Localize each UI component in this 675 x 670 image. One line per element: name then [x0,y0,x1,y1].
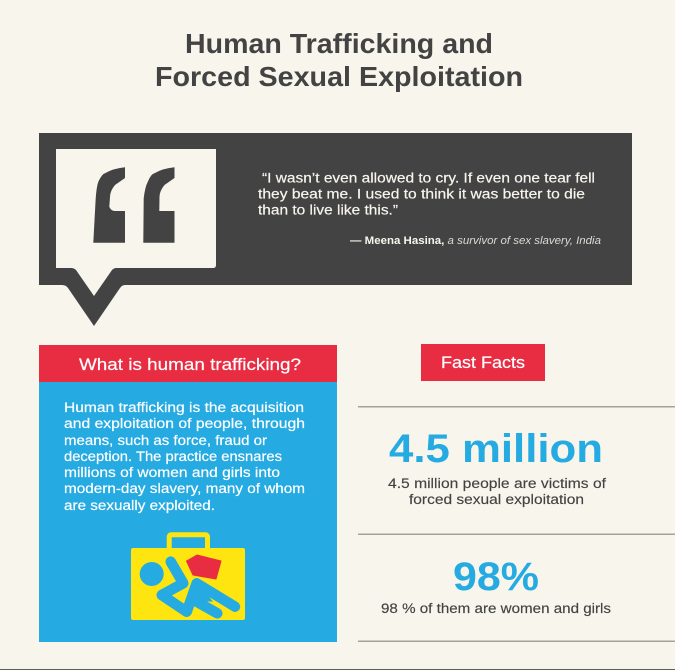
quote attribution: — Meena Hasina, a survivor of sex slavery, India [350,235,601,247]
title [155,28,523,92]
statistic caption: victims: 4.5 million people are victims of [388,476,606,491]
title: Forced Sexual Exploitation [155,61,523,92]
definition text: means, such as force, fraud or [64,433,268,448]
icon: speech bubble with quotation marks [56,149,216,296]
panel: what is human trafficking [39,345,337,642]
panel: survivor quote [39,133,632,326]
definition text: modern-day slavery, many of whom [64,481,305,496]
statistic: 4.5 million: 4.5 million [389,427,603,471]
panel header: What is human trafficking? [79,355,301,374]
definition text: millions of women and girls into [64,465,280,480]
statistic caption: victims: forced sexual exploitation [409,492,584,507]
definition text: Human trafficking is the acquisition [64,400,304,415]
fast facts heading: Fast Facts [441,354,525,372]
quote text: they beat me. I used to think it was better to die [258,186,585,202]
definition text: and exploitation of people, through [64,416,305,431]
fast facts heading [421,344,545,381]
statistic caption: women and girls: 98 % of them are women and girls [381,601,611,616]
statistic caption: victims [388,476,606,507]
panel header [39,345,337,382]
definition text [64,400,305,513]
definition text: deception. The practice ensnares [64,449,282,464]
definition text: are sexually exploited. [64,498,215,513]
panel: fast facts [358,344,675,642]
quote text [258,170,595,218]
quote text: “I wasn’t even allowed to cry. If even one tear fell [262,170,595,186]
title: Human Trafficking and [185,28,493,59]
panel body [39,382,337,642]
statistic: 98%: 98% [453,555,539,599]
speech bubble background [39,133,632,326]
quote text: than to live like this.” [258,202,398,218]
icon: person in suitcase [131,535,245,620]
